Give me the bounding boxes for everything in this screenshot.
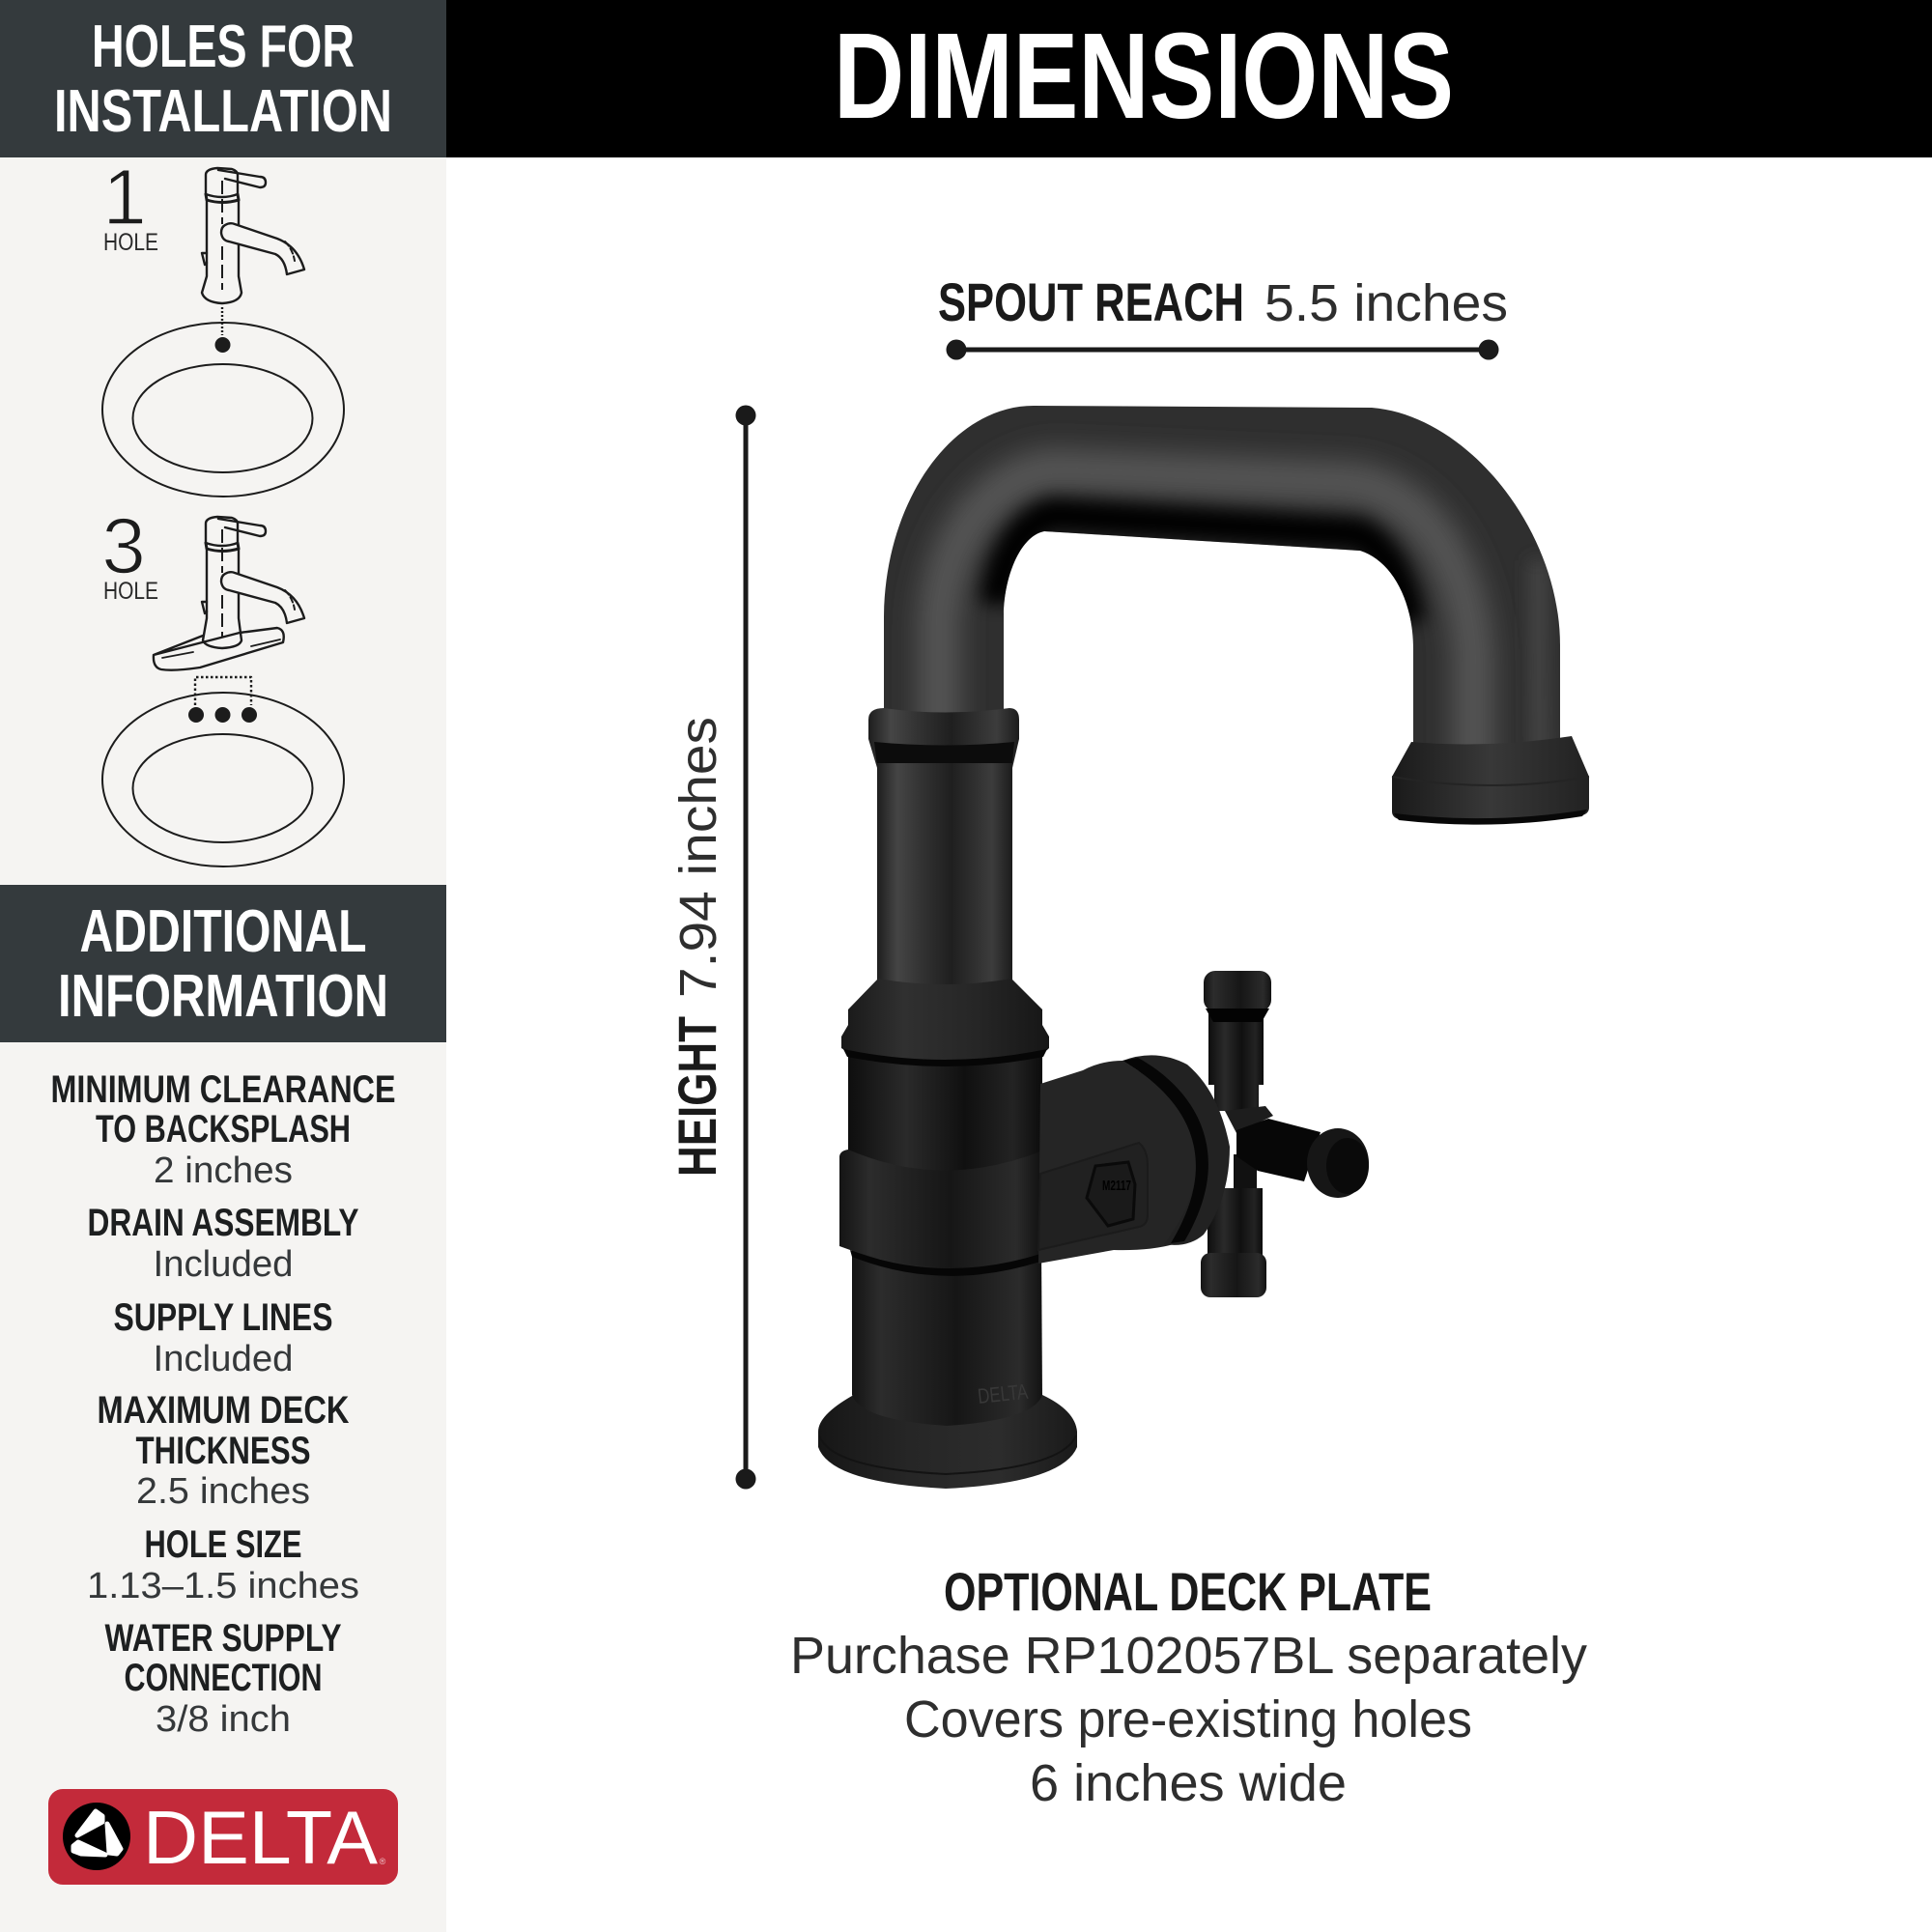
title banner: dimensions	[446, 0, 1932, 157]
faucet spout	[884, 406, 1560, 744]
faucet illustration	[818, 396, 1589, 1489]
spec list	[50, 1068, 396, 1740]
diagram: 3 hole installation	[101, 502, 344, 867]
spec: drain assembly	[87, 1202, 359, 1285]
spec: hole size: HOLE SIZE	[145, 1523, 301, 1566]
faucet body band	[839, 1150, 1040, 1267]
spec: maximum deck thickness	[97, 1389, 350, 1512]
spec: minimum clearance: 2 inches	[154, 1151, 293, 1191]
logo: delta: ®	[380, 1857, 386, 1866]
faucet nozzle	[1392, 736, 1589, 825]
logo: delta: DELTA	[143, 1795, 378, 1880]
dimension: spout reach: SPOUT REACH	[938, 271, 1244, 332]
faucet side arm	[1038, 1061, 1200, 1264]
note: optional deck plate: 6 inches wide	[1030, 1754, 1347, 1812]
spec: drain assembly: DRAIN ASSEMBLY	[87, 1202, 359, 1244]
heading: holes for installation	[0, 0, 446, 157]
diagram: 3 hole installation: 3	[101, 502, 146, 590]
diagram: 1 hole installation: HOLE	[103, 229, 158, 256]
spec: water supply connection	[104, 1617, 342, 1740]
dimension: height: HEIGHT	[667, 1016, 727, 1177]
dimension: height	[667, 406, 755, 1490]
faucet engraved name: DELTA	[977, 1379, 1029, 1408]
spec: maximum deck thickness: 2.5 inches	[136, 1471, 310, 1512]
faucet base	[818, 1395, 1077, 1489]
faucet shoulder	[841, 979, 1049, 1063]
spec: supply lines: Included	[153, 1339, 294, 1379]
spec: drain assembly: Included	[153, 1244, 294, 1285]
heading: holes for installation: INSTALLATION	[54, 78, 392, 145]
spec: hole size: 1.13–1.5 inches	[87, 1566, 359, 1606]
spec: water supply connection: WATER SUPPLY	[104, 1617, 342, 1660]
spec: hole size	[87, 1523, 359, 1606]
heading: additional information: ADDITIONAL	[79, 898, 367, 965]
heading: holes for installation: HOLES FOR	[92, 14, 355, 80]
spec: supply lines: SUPPLY LINES	[114, 1296, 332, 1339]
faucet ring flange	[1122, 1055, 1230, 1245]
spec: minimum clearance	[50, 1068, 396, 1191]
faucet hex bolt: M2117	[1102, 1178, 1131, 1194]
note: optional deck plate: Purchase RP102057BL separately	[790, 1627, 1587, 1685]
note: optional deck plate	[790, 1561, 1587, 1812]
spec: minimum clearance: TO BACKSPLASH	[96, 1108, 351, 1151]
faucet lower body	[852, 1246, 1042, 1426]
spec: minimum clearance: MINIMUM CLEARANCE	[50, 1068, 396, 1111]
handle post: right	[1225, 1106, 1369, 1198]
note: optional deck plate: Covers pre-existing holes	[904, 1690, 1472, 1748]
handle post: top	[1204, 971, 1271, 1111]
spec: water supply connection: 3/8 inch	[156, 1699, 291, 1740]
faucet mid body	[848, 1048, 1042, 1188]
dimension: spout reach: 5.5 inches	[1264, 274, 1508, 332]
handle post: bottom	[1201, 1154, 1266, 1297]
logo: delta	[48, 1789, 398, 1885]
faucet collar	[868, 708, 1019, 768]
diagram: 3 hole installation: HOLE	[103, 578, 158, 605]
spec: supply lines	[114, 1296, 332, 1379]
faucet arm plate	[1038, 1143, 1148, 1250]
faucet hex bolt	[1087, 1162, 1135, 1226]
panel: left sidebar	[0, 0, 446, 1932]
spec: maximum deck thickness: MAXIMUM DECK	[97, 1389, 350, 1432]
heading: additional information	[0, 885, 446, 1042]
title banner: dimensions: DIMENSIONS	[834, 8, 1454, 144]
diagram: 1 hole installation: 1	[102, 154, 147, 242]
spec: water supply connection: CONNECTION	[124, 1657, 323, 1699]
dimension: spout reach	[938, 271, 1508, 359]
heading: additional information: INFORMATION	[58, 963, 388, 1030]
spec: maximum deck thickness: THICKNESS	[135, 1430, 311, 1472]
dimension: height: 7.94 inches	[669, 717, 727, 998]
diagram: 1 hole installation	[102, 154, 344, 497]
note: optional deck plate: OPTIONAL DECK PLATE	[944, 1561, 1432, 1622]
faucet neck	[877, 763, 1012, 995]
